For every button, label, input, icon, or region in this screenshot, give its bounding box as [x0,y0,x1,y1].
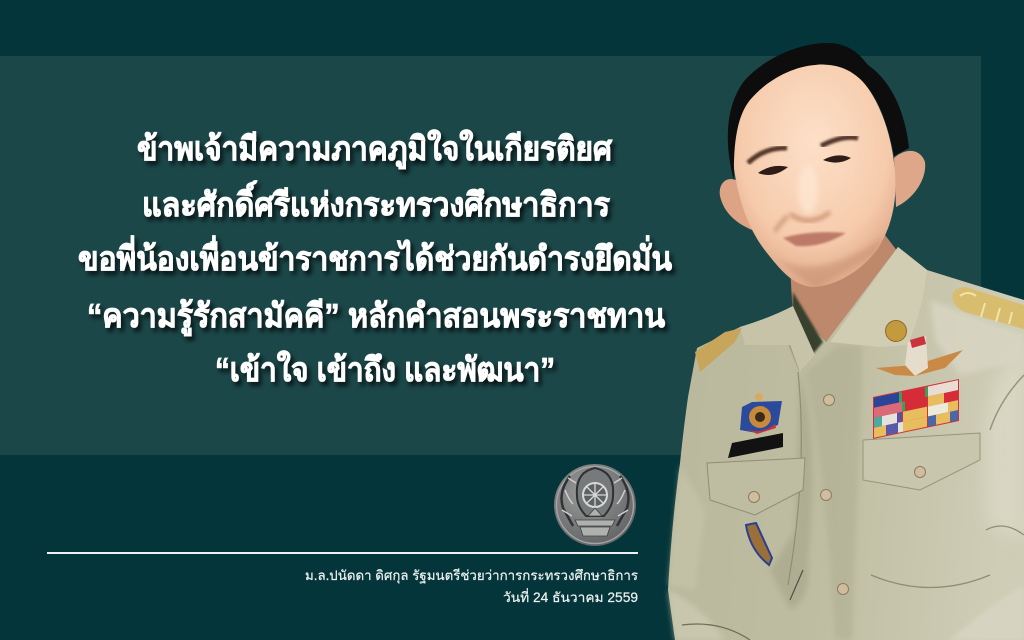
lower pin [746,523,772,565]
collar pin [886,320,906,342]
right ear [894,151,925,207]
right epaulette [952,287,1024,329]
neck [790,235,898,342]
attribution: ม.ล.ปนัดดา ดิศกุล รัฐมนตรีช่วยว่าการกระทรวงศึกษาธิการ [305,568,638,584]
quote text: ข้าพเจ้ามีความภาคภูมิใจในเกียรติยศ [137,129,613,170]
collar: left flap [740,306,815,372]
hair [728,43,909,180]
quote text: และศักดิ์ศรีแห่งกระทรวงศึกษาธิการ [142,180,610,223]
name tag [728,433,783,458]
pocket flap: right [863,433,980,490]
quote text [78,129,672,388]
attribution: วันที่ 24 ธันวาคม 2559 [503,588,638,605]
buttons [748,394,926,594]
face [733,64,895,287]
quote text: “ความรู้รักสามัคคี” หลักคำสอนพระราชทาน [87,297,665,337]
medal ribbons [873,379,959,439]
shirt shading [668,292,1024,640]
left ear [720,179,752,230]
shirt body [668,247,1024,640]
blue tag [867,443,884,474]
left epaulette [695,328,742,372]
icon: ministry emblem [554,464,636,546]
pocket flap: left [707,458,805,515]
quote text: “เข้าใจ เข้าถึง และพัฒนา” [215,350,555,388]
wings badge [876,336,963,376]
attribution [305,568,638,605]
panel: quote background [0,56,981,455]
face details [748,137,885,289]
name badge [740,393,782,434]
collar: right flap [830,247,927,347]
quote text: ขอพี่น้องเพื่อนข้าราชการได้ช่วยกันดำรงยึดมั่น [78,235,672,277]
portrait [668,43,1024,640]
divider line [47,552,638,554]
